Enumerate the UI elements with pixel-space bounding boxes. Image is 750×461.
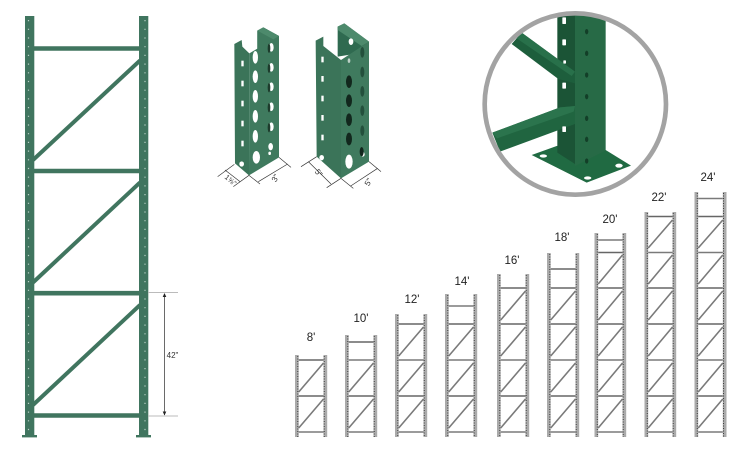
- label: 12 feet: 12': [404, 294, 420, 306]
- label: 8 feet: 8': [307, 332, 315, 344]
- label: 14 feet: 14': [454, 276, 470, 288]
- 16 foot frame: [497, 274, 529, 437]
- narrow column dimensions: 3": [270, 173, 281, 183]
- narrow column dimensions: [218, 157, 291, 188]
- wide column dimensions: [301, 157, 381, 188]
- label: 10 feet: 10': [354, 313, 368, 325]
- label: 22 feet: 22': [652, 192, 666, 204]
- 12 foot frame: [395, 314, 427, 437]
- 42 inch dimension: 42": [167, 351, 179, 360]
- narrow column detail: [234, 27, 279, 175]
- 8 foot frame: [295, 355, 327, 437]
- circular base plate close-up: [485, 3, 666, 195]
- 14 foot frame: [445, 294, 477, 437]
- 18 foot frame: [547, 253, 579, 437]
- label: 18 feet: 18': [554, 232, 570, 244]
- 42 inch dimension: [148, 292, 179, 416]
- wide column dimensions: 5": [363, 177, 374, 187]
- 20 foot frame: [594, 233, 626, 437]
- 10 foot frame: [345, 335, 377, 437]
- 24 foot frame: [694, 192, 726, 437]
- wide column detail: [316, 23, 369, 178]
- label: 20 feet: 20': [602, 214, 618, 226]
- 22 foot frame: [644, 212, 676, 437]
- narrow column dimensions: 1⅝": [223, 173, 239, 188]
- label: 16 feet: 16': [504, 255, 520, 267]
- large green upright frame: [22, 16, 151, 437]
- label: 24 feet: 24': [700, 172, 716, 184]
- wide column dimensions: 5": [313, 167, 324, 179]
